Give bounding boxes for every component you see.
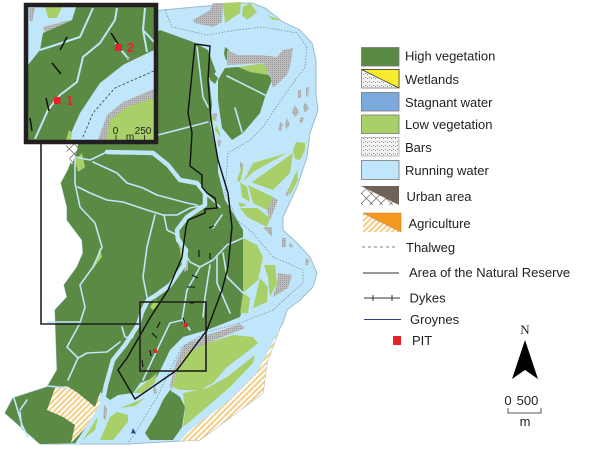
low vegetation bbox=[75, 2, 305, 442]
legend: groynes: Groynes bbox=[410, 312, 460, 327]
legend: agriculture: Agriculture bbox=[408, 216, 471, 231]
urban area bbox=[66, 144, 78, 165]
bars bbox=[103, 3, 309, 420]
scale bar: 0 bbox=[504, 393, 512, 408]
inset scale bar: 0 bbox=[113, 126, 119, 137]
inset bars bbox=[98, 89, 154, 140]
running water base bbox=[5, 3, 318, 444]
legend bbox=[361, 48, 570, 348]
inset scale bar: m bbox=[126, 132, 134, 143]
inset low vegetation bbox=[106, 98, 154, 140]
legend: high vegetation: High vegetation bbox=[405, 48, 495, 64]
inset dykes bbox=[30, 33, 118, 131]
scale bar bbox=[504, 393, 541, 429]
inset water bbox=[28, 7, 76, 65]
legend: bars: Bars bbox=[405, 140, 432, 155]
PIT 2 marker: 2 bbox=[127, 40, 134, 55]
PIT 1 marker: 1 bbox=[66, 93, 73, 108]
inset main river bbox=[68, 50, 154, 140]
legend: bars bbox=[362, 138, 432, 156]
legend: agriculture bbox=[363, 213, 471, 232]
legend: low vegetation: Low vegetation bbox=[405, 117, 492, 132]
legend: urban area: Urban area bbox=[406, 189, 472, 204]
high vegetation: islands bbox=[145, 47, 272, 440]
north arrow bbox=[512, 322, 538, 379]
legend: thalweg: Thalweg bbox=[406, 240, 455, 255]
inset map bbox=[26, 5, 156, 143]
legend: dykes bbox=[364, 290, 446, 306]
legend: PIT bbox=[393, 333, 432, 348]
legend: PIT: PIT bbox=[412, 333, 432, 348]
inset streams bbox=[35, 8, 154, 139]
legend: low vegetation bbox=[362, 115, 492, 134]
legend: running water bbox=[362, 160, 489, 180]
connector from zoom box to inset bbox=[41, 144, 139, 324]
legend: area of the natural reserve: Area of the Natural Reserve bbox=[409, 265, 570, 280]
high vegetation: main floodplain bbox=[5, 30, 243, 444]
legend: running water: Running water bbox=[405, 163, 489, 178]
legend: wetlands: Wetlands bbox=[405, 72, 459, 87]
groyne arrow bbox=[131, 428, 136, 434]
legend: stagnant water bbox=[362, 92, 493, 111]
zoom box bbox=[140, 302, 206, 371]
scale bar: 500 bbox=[517, 393, 538, 408]
water channels bbox=[14, 47, 265, 443]
thalweg bbox=[128, 10, 307, 443]
PIT markers on main map bbox=[153, 323, 188, 353]
legend: dykes: Dykes bbox=[410, 290, 446, 306]
legend: urban area bbox=[361, 186, 472, 205]
dykes on main map bbox=[142, 226, 214, 367]
inset scale bar: 250 bbox=[135, 126, 152, 137]
inset thalweg bbox=[83, 71, 154, 137]
legend: stagnant water: Stagnant water bbox=[405, 95, 493, 110]
area of the natural reserve outline bbox=[118, 44, 232, 399]
legend: groynes bbox=[364, 312, 460, 327]
legend: thalweg bbox=[362, 240, 455, 255]
north arrow: N bbox=[520, 322, 530, 337]
inset frame bbox=[26, 5, 156, 142]
legend: high vegetation bbox=[362, 48, 495, 66]
legend: wetlands bbox=[362, 70, 459, 88]
scale bar: m bbox=[520, 414, 530, 429]
map: river basin bbox=[5, 2, 318, 444]
inset scale bar bbox=[113, 126, 152, 143]
inset background bbox=[26, 5, 156, 142]
agriculture bbox=[47, 328, 280, 443]
